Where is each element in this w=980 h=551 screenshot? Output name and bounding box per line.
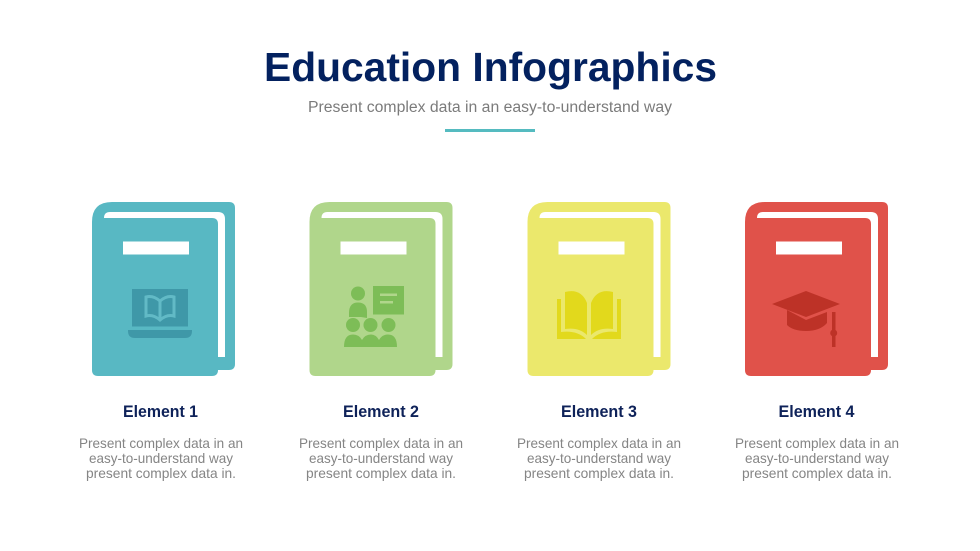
heading: element 4: Element 4 <box>778 403 855 421</box>
text: element 2 description: easy-to-understand way <box>309 450 453 466</box>
title: Education Infographics <box>264 44 717 90</box>
text: element 1 description: Present complex data in an <box>79 435 243 451</box>
heading: element 3: Element 3 <box>561 403 637 421</box>
text: element 3 description: easy-to-understand way <box>527 450 671 466</box>
panel: element 1 <box>79 202 243 481</box>
text: element 2 description: Present complex data in an <box>299 435 463 451</box>
book 3 <box>528 202 670 376</box>
panel: element 4 <box>735 202 899 481</box>
text: element 4 description: Present complex data in an <box>735 435 899 451</box>
subtitle: Present complex data in an easy-to-understand way <box>308 99 672 116</box>
panel: element 3 <box>517 202 681 481</box>
text: element 1 description: easy-to-understand way <box>89 450 233 466</box>
panel: element 2 <box>299 202 463 481</box>
book 4 <box>745 202 888 376</box>
accent line <box>445 129 535 132</box>
text: element 4 description: easy-to-understand way <box>745 450 889 466</box>
icon: laptop with open book <box>128 289 192 338</box>
text: element 3 description: Present complex data in an <box>517 435 681 451</box>
text: element 1 description: present complex data in. <box>86 465 236 481</box>
book 1 <box>92 202 235 376</box>
icon: open book <box>557 291 621 339</box>
text: element 4 description: present complex data in. <box>742 465 892 481</box>
text: element 3 description: present complex data in. <box>524 465 674 481</box>
text: element 2 description: present complex data in. <box>306 465 456 481</box>
icon: graduation cap <box>772 291 840 347</box>
book 2 <box>310 202 452 376</box>
heading: element 2: Element 2 <box>343 403 419 421</box>
icon: teacher and students <box>344 286 404 347</box>
heading: element 1: Element 1 <box>123 403 198 421</box>
